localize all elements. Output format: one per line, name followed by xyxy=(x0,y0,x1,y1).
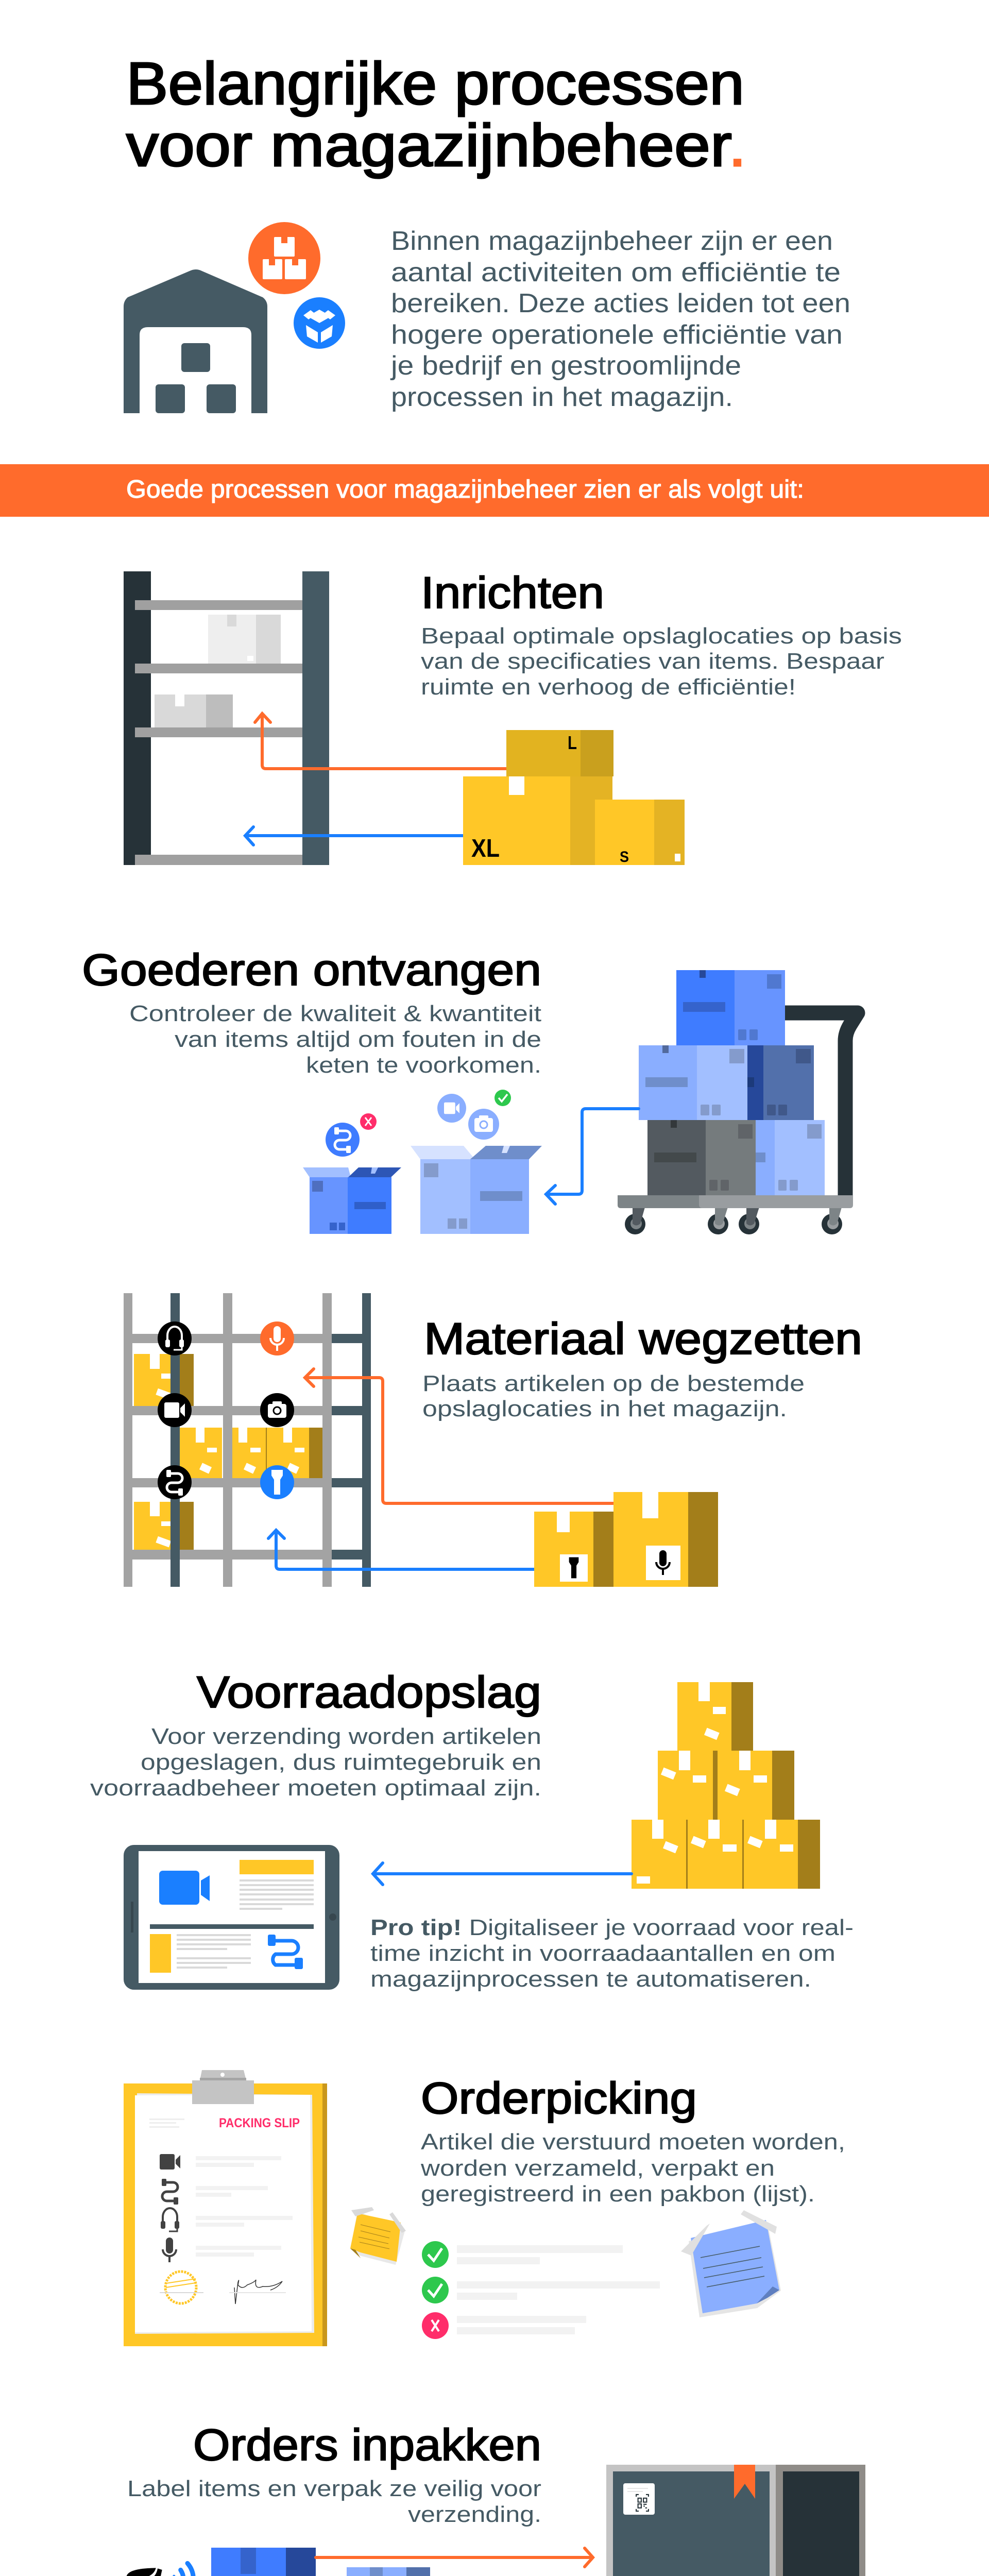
pro tip text: time inzicht in voorraadaantallen en om xyxy=(370,1941,835,1966)
arrow: blue to open boxes xyxy=(546,1109,639,1204)
box pyramid xyxy=(632,1682,820,1889)
panel: materiaal wegzetten xyxy=(124,1293,862,1587)
heading: Voorraadopslag xyxy=(197,1668,541,1717)
text block xyxy=(420,2129,845,2207)
text block: opgeslagen, dus ruimtegebruik en xyxy=(141,1750,541,1775)
text block: Plaats artikelen op de bestemde xyxy=(422,1371,805,1396)
panel: orders inpakken xyxy=(126,2420,865,2576)
arrow: orange to shelf xyxy=(305,1369,613,1503)
shelving rack xyxy=(124,571,329,865)
icon: video badge xyxy=(158,1393,192,1427)
box L xyxy=(506,730,613,776)
big open box xyxy=(411,1146,542,1234)
icon: cable badge xyxy=(158,1465,192,1499)
box stack on cart xyxy=(639,970,825,1195)
clipboard with packing slip: PACKING SLIP xyxy=(219,2116,300,2130)
intro text: bereiken. Deze acties leiden tot een xyxy=(391,289,850,318)
box with torch label xyxy=(534,1512,617,1587)
arrow: blue to floor xyxy=(245,827,463,845)
cart base and wheels xyxy=(618,1195,853,1234)
intro text xyxy=(390,226,850,412)
arrow: blue to tablet xyxy=(373,1863,632,1885)
text block xyxy=(127,2476,541,2527)
intro text: hogere operationele efficiëntie van xyxy=(391,320,843,350)
icon: camera badge xyxy=(468,1109,499,1140)
text block xyxy=(422,1371,805,1421)
title: voor magazijnbeheer . xyxy=(126,112,746,179)
banner: Goede processen voor magazijnbeheer zien er als volgt uit: xyxy=(126,476,804,503)
blue box with QR xyxy=(211,2548,316,2576)
icon: camera badge xyxy=(260,1393,294,1427)
text block xyxy=(129,1001,541,1078)
icon: blue open box badge xyxy=(294,297,345,349)
box L: L xyxy=(568,732,577,753)
heading: Orderpicking xyxy=(421,2074,697,2123)
sticky note: yellow xyxy=(350,2207,406,2265)
icon: video badge xyxy=(437,1094,466,1123)
tablet xyxy=(124,1845,339,1990)
heading: Orders inpakken xyxy=(193,2420,541,2470)
icon: torch badge xyxy=(260,1465,294,1499)
title: Belangrijke processen xyxy=(126,50,744,117)
small open box xyxy=(303,1167,401,1234)
sticky note: blue xyxy=(681,2210,781,2317)
box S: S xyxy=(620,849,629,866)
arrow: orange to crate xyxy=(316,2548,593,2567)
text block: worden verzameld, verpakt en xyxy=(420,2156,775,2181)
text block: Artikel die verstuurd moeten worden, xyxy=(421,2129,845,2155)
panel: goederen ontvangen xyxy=(82,945,858,1234)
text block: van de specificaties van items. Bespaar xyxy=(421,649,884,674)
text block: Voor verzending worden artikelen xyxy=(151,1724,541,1749)
title xyxy=(126,50,746,179)
text block: Bepaal optimale opslaglocaties op basis xyxy=(421,623,902,649)
banner xyxy=(0,464,989,517)
racking with boxes xyxy=(124,1293,371,1587)
intro text: aantal activiteiten om efficiëntie te xyxy=(391,258,841,287)
box XL: XL xyxy=(471,835,500,862)
box XL xyxy=(463,776,612,865)
intro text: processen in het magazijn. xyxy=(391,382,733,412)
text block: van items altijd om fouten in de xyxy=(175,1027,541,1052)
arrow: orange to shelf xyxy=(255,714,506,769)
icon: green check xyxy=(494,1090,511,1106)
panel: orderpicking xyxy=(124,2070,845,2346)
panel: voorraadopslag xyxy=(90,1668,854,1992)
text block: opslaglocaties in het magazijn. xyxy=(422,1396,787,1421)
pro tip text: Pro tip! Digitaliseer je voorraad voor real- xyxy=(370,1915,854,1940)
checklist xyxy=(422,2241,660,2339)
icon: red x xyxy=(360,1113,377,1130)
text block: geregistreerd in een pakbon (lijst). xyxy=(421,2181,815,2207)
arrow: blue to shelf xyxy=(268,1530,534,1569)
icon: barcode scanner xyxy=(126,2563,193,2576)
box with mic label xyxy=(613,1492,718,1587)
icon: warehouse with badges xyxy=(124,222,345,413)
heading: Goederen ontvangen xyxy=(82,945,541,995)
icon: cable badge xyxy=(326,1123,360,1157)
pro tip text: magazijnprocessen te automatiseren. xyxy=(370,1967,811,1992)
intro text: Binnen magazijnbeheer zijn er een xyxy=(391,226,833,256)
text block: voorraadbeheer moeten optimaal zijn. xyxy=(90,1775,541,1801)
packing crate on wheels xyxy=(606,2465,865,2576)
icon: mic badge xyxy=(260,1321,294,1355)
panel: inrichten xyxy=(124,568,902,866)
heading: Materiaal wegzetten xyxy=(424,1314,862,1364)
text block: Label items en verpak ze veilig voor xyxy=(127,2476,541,2501)
pro tip text xyxy=(370,1915,854,1992)
text block: ruimte en verhoog de efficiëntie! xyxy=(421,674,796,700)
heading: Inrichten xyxy=(421,568,604,618)
cart handle xyxy=(780,1013,858,1196)
light blue box with QR xyxy=(347,2567,430,2576)
text block xyxy=(90,1724,541,1801)
box S xyxy=(595,800,685,866)
text block: Controleer de kwaliteit & kwantiteit xyxy=(129,1001,541,1026)
icon: headset badge xyxy=(158,1321,192,1355)
intro text: je bedrijf en gestroomlijnde xyxy=(390,351,741,381)
text block xyxy=(421,623,902,700)
clipboard with packing slip xyxy=(124,2070,327,2346)
text block: keten te voorkomen. xyxy=(306,1053,541,1078)
icon: orange boxes badge xyxy=(248,222,320,294)
text block: verzending. xyxy=(408,2502,541,2527)
icon: warehouse xyxy=(124,269,267,413)
